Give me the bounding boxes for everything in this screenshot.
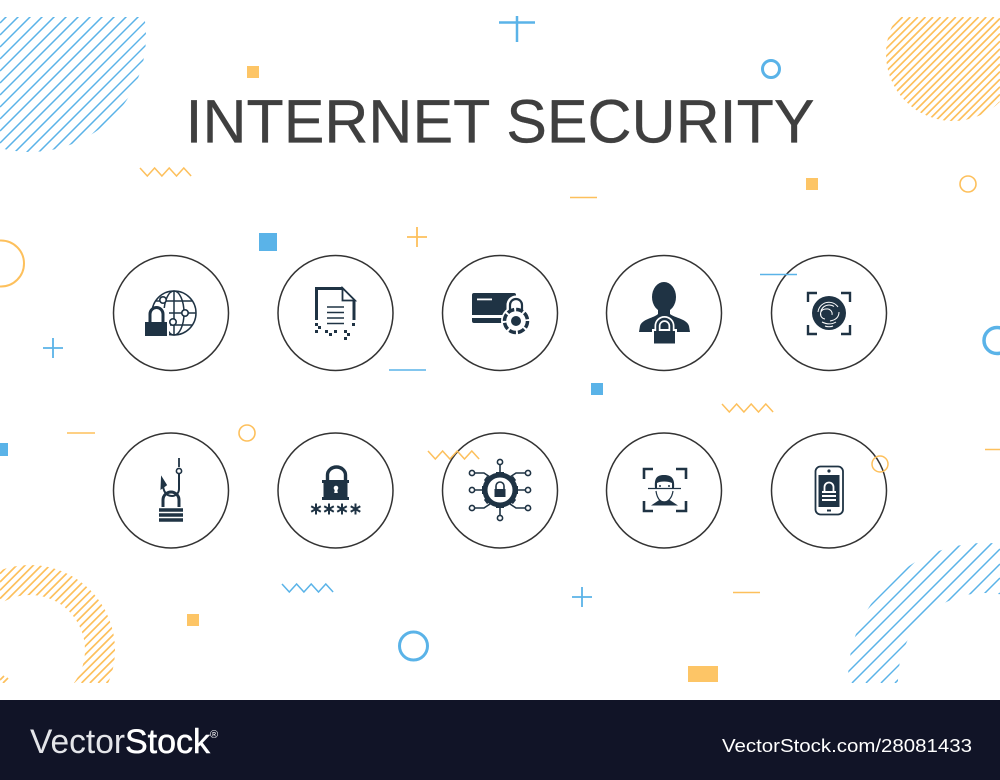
- footer logo: Stock: [125, 723, 211, 761]
- blue accent over circle: [760, 274, 797, 276]
- hatched ring: bottom left: [0, 565, 115, 683]
- footer logo: Vector: [30, 723, 125, 761]
- icon: person with padlock: [639, 282, 690, 345]
- icon: face recognition: [644, 469, 686, 511]
- icon: credit card with gear lock: [472, 293, 531, 336]
- hatched blob: top left: [0, 17, 146, 152]
- circle outlines row 2: [114, 433, 886, 548]
- icon: phishing hook and lock: [159, 458, 183, 520]
- orange accents over circles: [428, 451, 888, 472]
- icon: gear lock circuit: [469, 459, 531, 521]
- icon: globe with padlock: [143, 291, 196, 338]
- hatched ring: bottom right: [848, 543, 1000, 683]
- circle outlines row 1: [114, 256, 886, 370]
- footer logo: [30, 723, 218, 761]
- footer logo: ®: [210, 729, 218, 741]
- hatched blob: top right: [886, 17, 1000, 121]
- icon: padlock with password asterisks: [311, 467, 360, 514]
- footer url: VectorStock.com/28081433: [722, 736, 972, 756]
- footer bar: [0, 700, 1000, 780]
- icon: shredded document: [315, 288, 355, 340]
- icon: smartphone with padlock: [816, 466, 843, 514]
- icon: fingerprint scan: [808, 293, 850, 334]
- title: INTERNET SECURITY: [186, 88, 814, 156]
